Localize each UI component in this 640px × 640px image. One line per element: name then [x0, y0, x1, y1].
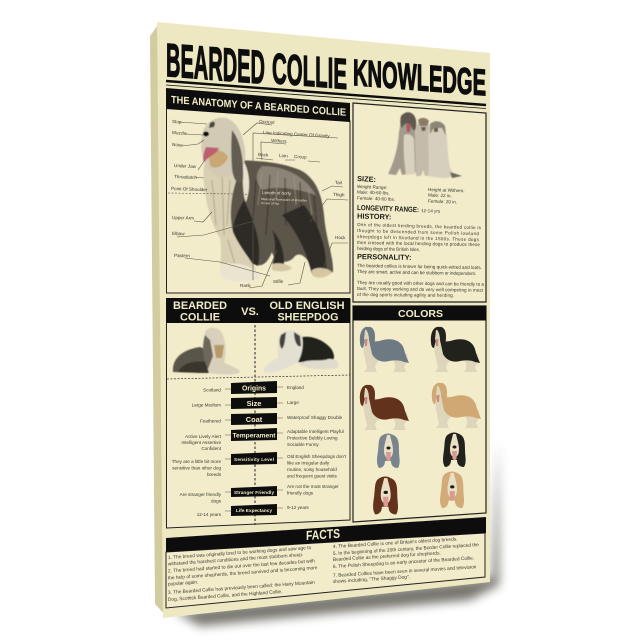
anatomy labels: Under Jaw	[174, 163, 197, 169]
anatomy labels: Stop	[172, 119, 182, 125]
size text: Male: 22 in.	[428, 193, 452, 198]
facts heading: FACTS	[306, 526, 340, 543]
anatomy labels: Loin	[279, 153, 288, 158]
head: brown	[373, 476, 398, 514]
size text: Weight Range:	[357, 184, 387, 190]
history: thought to be descended from some Polish lowland	[357, 228, 480, 236]
panel: breed summary	[353, 103, 486, 302]
longevity range: LONGEVITY RANGE:	[357, 203, 419, 214]
old english sheepdog traits: routine, noisy household	[287, 467, 337, 472]
bearded collie traits	[172, 388, 222, 517]
old english sheepdog traits: Are not the most stranger	[287, 484, 339, 489]
facts right column: Bearded Collie as the preferred dog for shepherds.	[333, 550, 441, 563]
facts left column: withstand the harshest conditions and the most stubborn sheep.	[168, 552, 304, 567]
old english sheepdog traits: Protective Bubbly Loving	[287, 436, 338, 440]
comparison category labels: Size	[247, 399, 261, 408]
anatomy labels: Line Indicating Center Of Gravity	[263, 130, 330, 139]
anatomy labels: Back	[258, 152, 269, 158]
old english sheepdog traits: 9-12 years	[287, 505, 309, 510]
panel: colors	[353, 306, 486, 522]
comparison heading: OLD ENGLISH	[270, 300, 345, 312]
anatomy labels: Point Of Shoulder	[171, 186, 208, 192]
history: HISTORY:	[357, 212, 392, 221]
facts left column: popular again.	[168, 579, 198, 587]
personality: They are smart, active and can be stubborn or independent.	[357, 269, 476, 276]
comparison category labels: Coat	[246, 415, 263, 424]
anatomy labels	[171, 119, 346, 288]
anatomy labels: Stifle	[273, 279, 284, 284]
head: black	[443, 432, 466, 467]
old english sheepdog traits: Large	[287, 400, 299, 405]
size text: SIZE:	[357, 174, 376, 184]
old english sheepdog traits: Sociable Funny	[287, 442, 319, 447]
title rules	[166, 81, 486, 105]
dog: brown	[360, 385, 409, 430]
panel border: colors	[353, 306, 486, 522]
bearded collie photo	[173, 328, 240, 374]
anatomy labels: Rank	[240, 283, 251, 288]
panel: breed comparison	[166, 298, 350, 528]
head: fawn	[440, 471, 464, 508]
dog: blue-grey	[360, 327, 409, 372]
anatomy heading: THE ANATOMY OF A BEARDED COLLIE	[171, 94, 346, 119]
history: then crossed with the local herding dogs to produce these	[357, 240, 480, 247]
panel: facts	[166, 517, 486, 608]
bearded collie traits: Scotland	[203, 388, 221, 392]
facts right column: 4. The Bearded Collie is one of Britain's oldest dog breeds.	[333, 536, 458, 550]
anatomy labels: Length of body	[262, 190, 292, 196]
size text: Female: 40-60 lbs.	[357, 196, 395, 202]
anatomy labels: Pastern	[174, 253, 190, 258]
old english sheepdog traits: and frequent guest visits	[287, 474, 337, 478]
facts right column: shows including, "The Shaggy Dog".	[333, 574, 410, 585]
comparison category labels: Stranger Friendly	[234, 490, 274, 495]
anatomy labels: Elbow	[172, 231, 185, 236]
old english sheepdog traits: England	[287, 385, 304, 390]
bearded collie traits: Are stranger friendly	[180, 492, 222, 497]
history	[357, 212, 482, 252]
anatomy labels: Croup	[294, 154, 307, 160]
facts right column: 6. The Polish Sheepdog is an early ancestor of the Bearded Collie.	[333, 555, 474, 570]
facts left column: 1. The breed was originally bred to be working dogs and saw age to	[168, 545, 312, 561]
canvas side edge	[150, 22, 168, 618]
personality: of the dog sports including agility and herding.	[357, 292, 454, 298]
anatomy dog illustration	[201, 118, 333, 281]
anatomy labels: Tail	[335, 180, 342, 185]
bearded collie traits: They are a little bit more	[172, 459, 221, 464]
facts left column	[168, 545, 318, 603]
colors heading: COLORS	[398, 308, 443, 320]
anatomy labels: Thigh	[333, 192, 345, 197]
facts right column	[333, 536, 479, 585]
facts right column: 7. Bearded Collies have been seen in several movies and television	[333, 564, 477, 579]
size text: Female: 20 in.	[428, 199, 457, 205]
bearded collie traits: Large Medium	[192, 402, 221, 408]
bearded collie traits: Feathered	[200, 418, 221, 424]
panel border: comparison	[166, 299, 350, 528]
title: BEARDED	[166, 33, 265, 94]
facts left column: the help of some shepherds, the breed survived and is becoming more	[168, 565, 318, 581]
old english sheepdog traits: like an irregular daily	[287, 460, 330, 466]
canvas front	[157, 22, 490, 618]
comparison category labels: Sensitivity Level	[234, 457, 274, 462]
facts left column: 2. The breed had started to die out over the last few decades but with	[168, 558, 315, 574]
title: KNOWLEDGE	[353, 51, 486, 103]
panel border: breed summary	[353, 103, 486, 302]
comparison category labels: Origins	[242, 386, 266, 392]
panel: anatomy	[166, 88, 350, 293]
history: herding dogs of the British Isles.	[357, 246, 420, 252]
personality: fault. They enjoy working and do very well competing in most	[357, 286, 484, 293]
old english sheepdog traits: Waterproof Shaggy Double	[287, 415, 343, 420]
comparison dashed dividers	[167, 375, 350, 379]
bearded collie traits: Active Lively Alert	[185, 434, 222, 439]
personality: They are usually good with other dogs and can be friendly to a	[357, 280, 484, 287]
bearded collie traits: sensitive than other dog	[172, 466, 221, 470]
history: One of the oldest herding breeds, the bearded collie is	[357, 222, 482, 230]
size text: Male: 40-60 lbs.	[357, 190, 390, 196]
anatomy labels: Withers	[271, 138, 287, 144]
three dogs photo	[388, 112, 462, 178]
comparison connector ticks	[225, 387, 283, 511]
personality: The bearded collies is known for being quick-witted and loofs.	[357, 263, 482, 270]
old english sheepdog traits: Adaptable Intelligent Playful	[287, 429, 344, 434]
anatomy labels: Nose	[172, 142, 183, 148]
comparison heading	[166, 298, 350, 324]
bearded collie traits: Confident	[201, 446, 222, 451]
panel border: facts	[166, 533, 485, 608]
anatomy labels: to rear of hip	[261, 201, 279, 206]
anatomy labels: Throatlatch	[174, 174, 198, 180]
old english sheepdog traits: Old English Sheepdogs don't	[287, 454, 347, 459]
anatomy labels: Upper Arm	[172, 215, 194, 221]
personality	[357, 252, 484, 298]
comparison heading: BEARDED	[173, 300, 227, 312]
anatomy labels: Measured from point of shoulder	[261, 197, 308, 203]
bearded collie traits: dogs	[211, 498, 222, 504]
comparison category labels	[231, 381, 277, 516]
panel border: anatomy	[166, 108, 350, 293]
comparison category labels: Temperament	[232, 432, 276, 440]
comparison heading: COLLIE	[180, 312, 220, 324]
comparison heading: VS.	[241, 306, 259, 318]
size text: Height at Withers:	[428, 187, 465, 193]
anatomy labels: Hock	[335, 235, 346, 240]
facts heading	[166, 517, 486, 552]
bearded collie traits: 12-14 years	[197, 512, 222, 517]
history: sheepdogs left in Scotland in the 1500s. These dogs	[357, 234, 480, 242]
facts left column: Dog, Scottish Bearded Collie, and the Highland Collie.	[168, 589, 283, 603]
bearded collie traits: breeds	[207, 472, 222, 477]
head: blue-grey	[377, 434, 400, 468]
personality: PERSONALITY:	[357, 252, 412, 262]
anatomy leader lines	[168, 122, 348, 288]
canvas shadow	[175, 440, 499, 626]
title: COLLIE	[272, 45, 347, 99]
anatomy labels: Occiput	[259, 119, 275, 125]
dog: black	[431, 327, 480, 372]
old english sheepdog traits: friendly dogs	[287, 490, 314, 496]
facts left column: 3. The Bearded Collie has previously been called: the Hairy Mountain	[168, 580, 315, 596]
longevity range: 12-14 yrs	[421, 208, 441, 214]
dog: fawn	[432, 383, 481, 428]
comparison category labels: Life Expectancy	[236, 508, 272, 513]
color swatch dogs	[360, 327, 481, 514]
old english sheepdog traits	[287, 385, 347, 510]
anatomy labels: Muzzle	[172, 130, 187, 136]
facts right column: 5. In the beginning of the 20th century, the Border Collie replaced the	[333, 542, 479, 557]
comparison heading: SHEEPDOG	[278, 312, 338, 324]
colors heading	[353, 306, 486, 320]
old english sheepdog photo	[264, 330, 339, 372]
bearded collie traits: Intelligent Assertive	[181, 440, 221, 445]
size text	[357, 174, 465, 205]
